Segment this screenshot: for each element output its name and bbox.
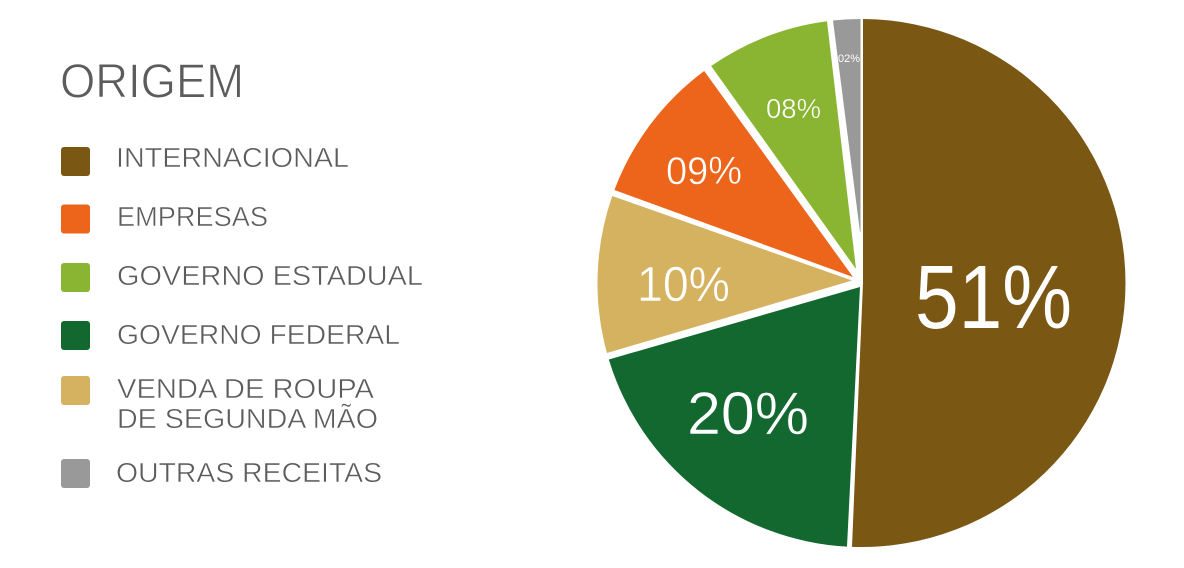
slice: governo federal 20% bbox=[609, 287, 860, 547]
title: ORIGEM bbox=[60, 56, 244, 108]
slice: internacional 51% bbox=[852, 19, 1126, 547]
legend item: empresas: EMPRESAS bbox=[117, 201, 268, 232]
legend item: venda de roupa de segunda mao: DE SEGUNDA MÃO bbox=[117, 403, 378, 434]
legend item: governo federal: GOVERNO FEDERAL bbox=[117, 319, 400, 350]
legend item: internacional: INTERNACIONAL bbox=[116, 142, 349, 173]
slice: governo federal 20%: 20% bbox=[687, 380, 809, 447]
slice: governo estadual 08% bbox=[711, 21, 856, 269]
slice: empresas 09% bbox=[614, 71, 853, 277]
slice: outras receitas 02% bbox=[833, 19, 860, 232]
legend bbox=[61, 142, 423, 488]
legend item: venda de roupa de segunda mao bbox=[61, 373, 378, 434]
slice: internacional 51%: 51% bbox=[915, 248, 1072, 348]
legend item: governo estadual: GOVERNO ESTADUAL bbox=[117, 260, 423, 291]
slice: governo estadual 08%: 08% bbox=[766, 93, 821, 124]
legend item: outras receitas: OUTRAS RECEITAS bbox=[116, 457, 382, 488]
slice: venda de roupa 10%: 10% bbox=[637, 258, 730, 312]
pie chart bbox=[598, 19, 1126, 547]
slice: empresas 09%: 09% bbox=[666, 150, 742, 193]
legend item: empresas bbox=[61, 201, 268, 234]
slice: venda de roupa 10% bbox=[598, 196, 852, 353]
slice: outras receitas 02%: 02% bbox=[838, 53, 860, 65]
legend item: venda de roupa de segunda mao: VENDA DE ROUPA bbox=[117, 373, 374, 404]
